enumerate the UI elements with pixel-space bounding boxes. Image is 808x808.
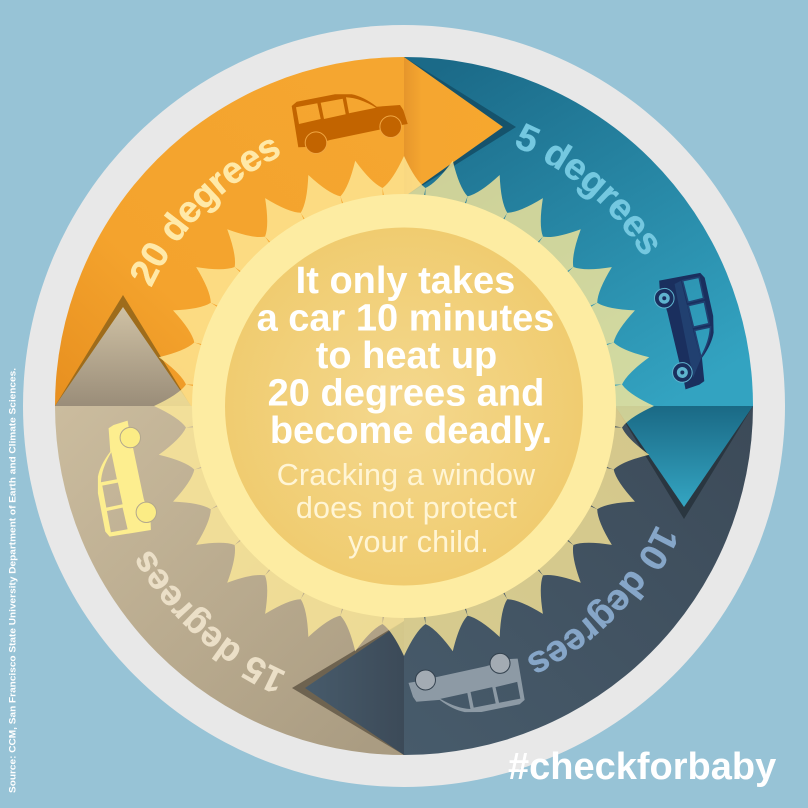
label: 20 degrees: 20 degrees [130, 140, 280, 288]
arrow: orange into teal [404, 57, 516, 197]
label: 10 degrees: 10 degrees [528, 526, 676, 672]
icon: orange van upright [292, 94, 408, 154]
sun outer disc [192, 194, 616, 618]
label: 5 degrees: 5 degrees [516, 123, 658, 254]
sun rays [154, 156, 654, 656]
subtext: Cracking a window [277, 458, 536, 492]
icon: grey van upside down [408, 653, 525, 713]
quadrant: 20 degrees orange [55, 57, 404, 406]
quadrant: 15 degrees tan [55, 406, 404, 755]
temperature wheel [55, 57, 753, 755]
headline: become deadly. [270, 410, 552, 452]
label: 15 degrees: 15 degrees [136, 552, 286, 692]
sun [154, 156, 654, 656]
icon: yellow van on its side [98, 421, 156, 537]
source credit: Source: CCM, San Francisco State University Department of Earth and Climate Sciences. [8, 368, 18, 793]
subtext: does not protect [296, 491, 517, 525]
headline: to heat up [316, 335, 497, 377]
quadrant: 5 degrees teal [404, 57, 753, 406]
headline: a car 10 minutes [257, 298, 554, 340]
arrow: teal into slate [615, 406, 753, 519]
hashtag: #checkforbaby [508, 746, 776, 788]
arrow: slate into tan [292, 621, 404, 755]
icon: navy van on its side [654, 273, 715, 390]
headline [257, 260, 554, 452]
subtext: your child. [348, 525, 489, 559]
headline: 20 degrees and [268, 372, 544, 414]
quadrant: 10 degrees slate [404, 406, 753, 755]
sun inner disc [225, 228, 583, 586]
subtext [277, 458, 536, 559]
arrow: tan into orange [55, 295, 191, 406]
headline: It only takes [296, 260, 515, 302]
